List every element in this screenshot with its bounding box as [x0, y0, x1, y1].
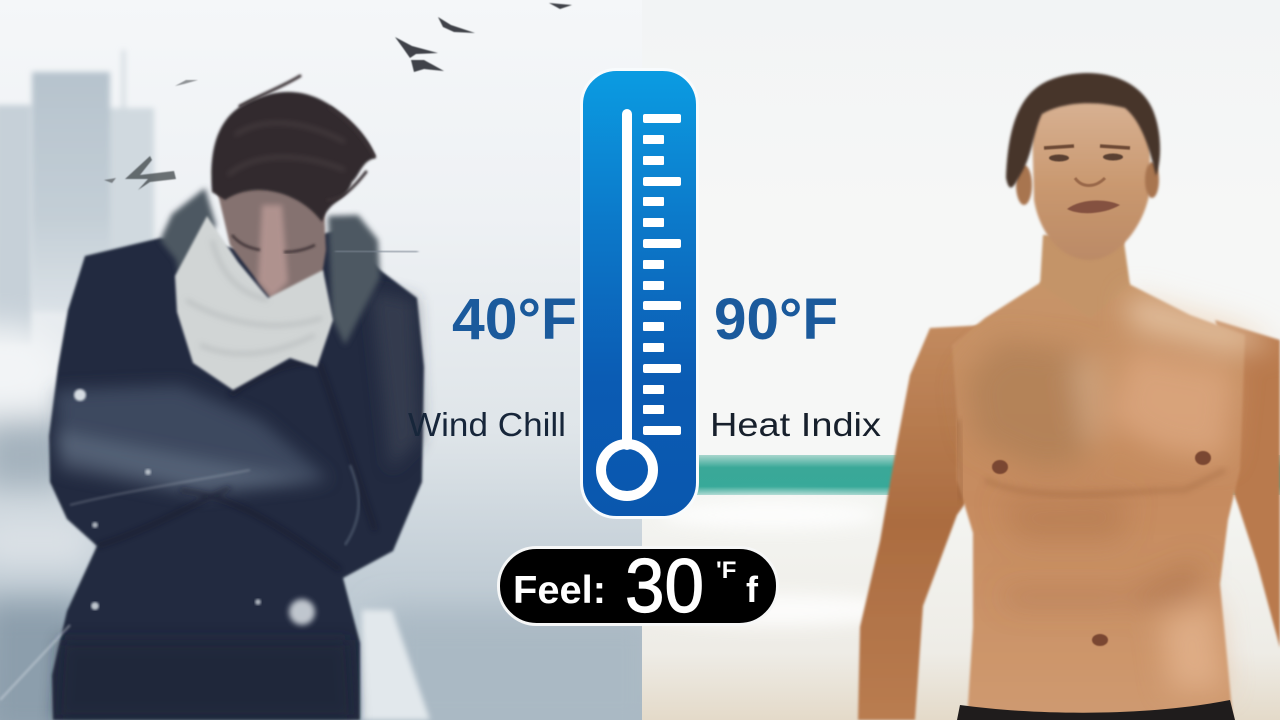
thermometer: [582, 70, 698, 518]
face: [217, 184, 326, 300]
coat: [49, 230, 424, 720]
wind streaks and snow: [0, 470, 250, 700]
chest underline: [985, 470, 1225, 494]
wind-blurred coat sleeve: [55, 385, 330, 496]
city skyline in fog: [0, 50, 154, 345]
snowflakes: [74, 389, 315, 625]
flying birds: [104, 3, 572, 190]
trailing unit: f: [746, 569, 759, 610]
road edge: [362, 610, 430, 720]
pill background: [498, 548, 778, 624]
blowing hair strand at collar: [335, 251, 418, 252]
sea band: [697, 455, 1280, 495]
fur collar: [160, 188, 380, 345]
heat index label: Heat Indix: [710, 406, 882, 443]
feel label: Feel:: [513, 569, 606, 612]
left arm: [858, 325, 985, 720]
hot temperature label: 90°F: [714, 287, 838, 352]
digital reading: 30: [625, 544, 704, 629]
torso: [952, 281, 1245, 720]
windblown hair: [211, 76, 376, 222]
person in winter coat: [49, 76, 424, 720]
panel: cold side, wind chill: [0, 0, 660, 720]
shirtless man: [858, 73, 1280, 720]
face highlight and nose: [258, 205, 288, 298]
thermometer scale ticks: [643, 114, 681, 435]
coat tone variation: [55, 290, 420, 720]
beach and surf: [642, 495, 1280, 720]
neck: [1038, 233, 1132, 286]
scarf: [175, 216, 333, 390]
feels-like readout pill: [498, 544, 778, 629]
nipples and navel: [992, 451, 1211, 646]
fog and snowy ground: [0, 325, 660, 720]
hair: [1006, 73, 1160, 188]
coat hand sleeve highlight: [345, 465, 359, 545]
right arm: [1215, 320, 1280, 648]
thermometer tube and bulb: [601, 114, 653, 496]
closed eyes and brows: [232, 235, 315, 252]
swim trunks: [957, 700, 1235, 720]
scarf folds: [186, 240, 322, 354]
arm and torso crease: [958, 420, 962, 500]
coat arm folds: [97, 363, 375, 570]
face features: [1044, 146, 1130, 213]
thermometer body: [582, 70, 698, 518]
ears: [1016, 162, 1159, 205]
panel: hot side, heat index: [642, 0, 1280, 720]
cold temperature label: 40°F: [452, 287, 577, 352]
wind chill label: Wind Chill: [408, 406, 566, 443]
head: [1032, 98, 1150, 260]
degree unit: 'F: [716, 557, 736, 584]
skin tone shading: [965, 295, 1280, 690]
